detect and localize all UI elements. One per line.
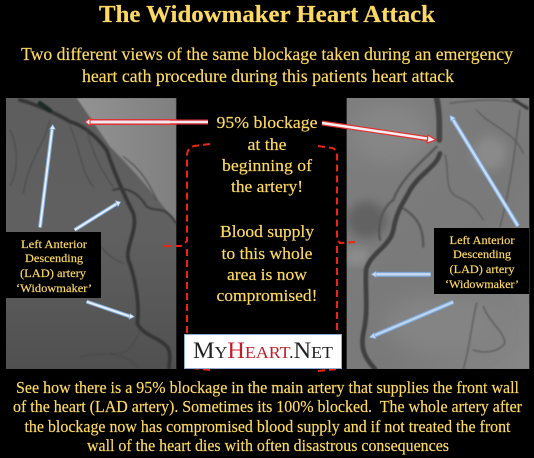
callout: right LAD label: ‘Widowmaker’ <box>445 277 519 291</box>
center callout text: at the <box>248 135 286 154</box>
lighter background region <box>77 98 176 223</box>
logo: MyHeart.net <box>184 334 342 368</box>
arrow: right blue lower <box>369 302 453 339</box>
callout: left LAD label <box>6 232 101 298</box>
center callout text: compromised! <box>216 286 318 305</box>
callout: left LAD label: (LAD) artery <box>20 266 86 280</box>
caption: the blockage now has compromised blood supply and if not treated the front <box>24 417 511 436</box>
arrow: right blue middle <box>371 271 431 277</box>
caption <box>13 378 522 455</box>
callout: left LAD label: ‘Widowmaker’ <box>16 281 92 295</box>
center callout text: beginning of <box>222 156 312 175</box>
arrow: red blockage right <box>322 123 436 143</box>
callout: right LAD label: Descending <box>453 247 511 261</box>
center callout text: the artery! <box>231 177 303 196</box>
arrow: left blue middle <box>75 201 121 230</box>
callout: right LAD label <box>434 228 529 294</box>
callout: right LAD label: (LAD) artery <box>450 262 514 276</box>
center callout text <box>216 113 318 305</box>
callout: left LAD label: Descending <box>25 251 83 265</box>
soft background shading <box>347 202 387 238</box>
panel: right angiogram <box>343 98 529 369</box>
arrow: red blockage middle stub <box>170 120 208 124</box>
center callout text: area is now <box>227 265 308 284</box>
center callout text: Blood supply <box>220 222 315 241</box>
title: The Widowmaker Heart Attack <box>99 2 436 28</box>
center callout text: to this whole <box>222 244 312 263</box>
subtitle: Two different views of the same blockage taken during an emergency <box>21 44 513 64</box>
subtitle <box>21 44 513 86</box>
arrow: red blockage left <box>85 118 177 126</box>
center callout text: 95% blockage <box>216 113 318 132</box>
logo: MyHeart.net: MYHEART.NET <box>193 338 334 363</box>
arrow: left blue upper <box>40 125 55 227</box>
arrow: right blue upper <box>450 115 518 226</box>
dashed bracket: compromised area <box>164 144 355 371</box>
subtitle: heart cath procedure during this patients heart attack <box>82 66 454 86</box>
LAD vessel <box>10 100 176 369</box>
callout: right LAD label: Left Anterior <box>450 233 514 247</box>
panel: left angiogram <box>6 98 177 369</box>
LAD vessel <box>362 98 528 369</box>
arrow: left blue lower <box>87 302 134 319</box>
caption: wall of the heart dies with often disastrous consequences <box>87 436 449 455</box>
callout: left LAD label: Left Anterior <box>21 237 87 251</box>
